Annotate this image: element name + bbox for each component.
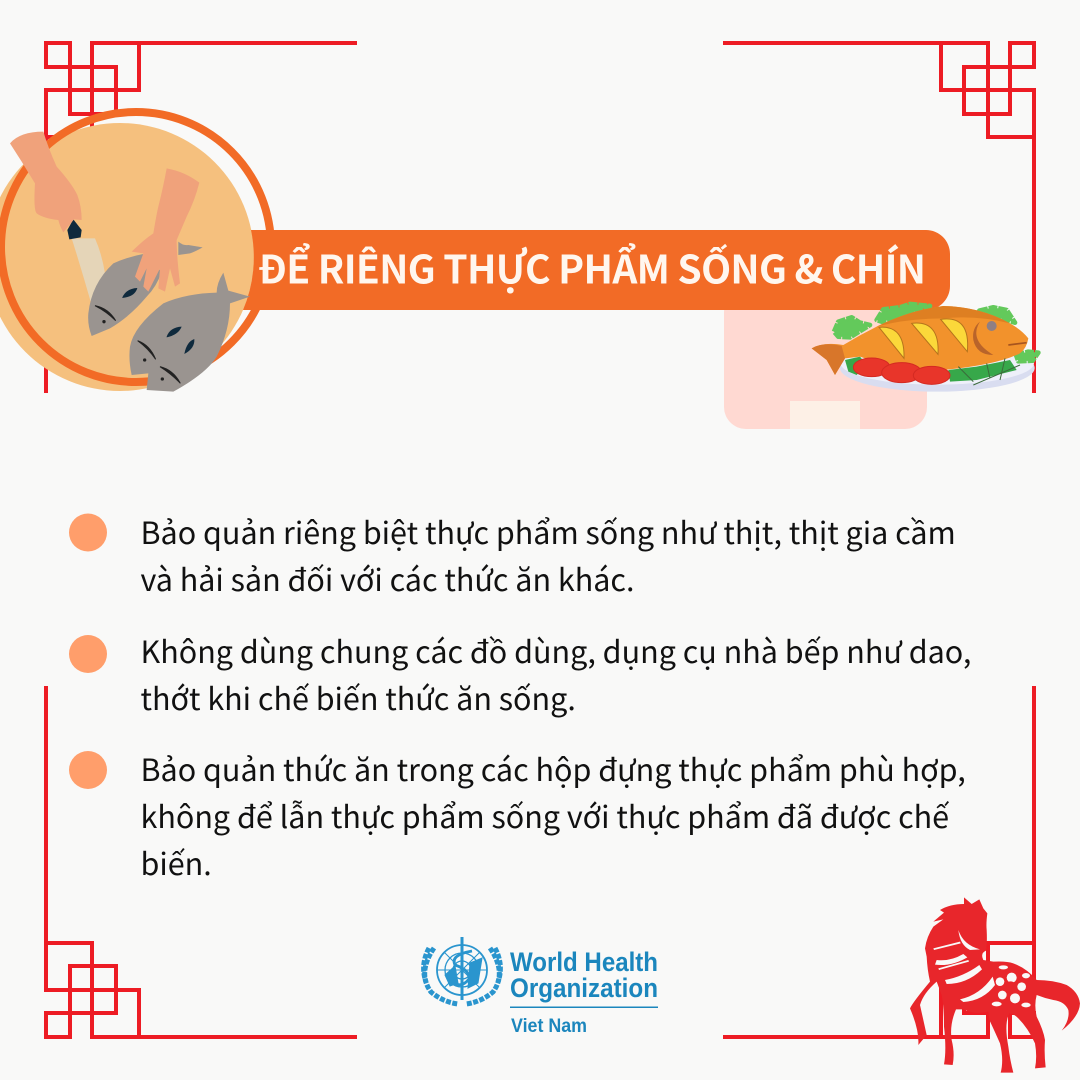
flower centre [1005, 981, 1017, 993]
bullet text 3: không để lẫn thực phẩm sống với thực phẩm đã được chế [140, 793, 949, 837]
bullet text 2: Không dùng chung các đồ dùng, dụng cụ nhà bếp như dao, [140, 628, 971, 672]
bullet text 1: và hải sản đối với các thức ăn khác. [140, 556, 634, 600]
plate [840, 342, 1035, 392]
frame: top-left corner [46, 43, 357, 393]
horse silhouette [910, 897, 1080, 1073]
tomato slices [853, 358, 950, 384]
tail shading [812, 344, 845, 375]
bullet text 1: Bảo quản riêng biệt thực phẩm sống như thịt, thịt gia cầm [140, 509, 956, 553]
lettuce [834, 304, 1038, 361]
dark greens [845, 357, 1017, 382]
bullet text 3: Bảo quản thức ăn trong các hộp đựng thực phẩm phù hợp, [140, 746, 966, 790]
Viet Nam: Viet Nam [511, 1016, 587, 1037]
gill and eye [973, 321, 1027, 355]
fish back shading [877, 306, 1010, 327]
WHO logo [424, 937, 658, 1037]
bullet 3 [69, 746, 966, 884]
bullet text 2: thớt khi chế biến thức ăn sống. [140, 675, 576, 719]
collar details [933, 930, 995, 1002]
frame: bottom-left corner [46, 686, 357, 1037]
peach circle [0, 123, 254, 391]
left hand [10, 132, 82, 232]
bullet text 3: biến. [140, 840, 212, 884]
cooked fish body [812, 306, 1028, 375]
herb sprig [958, 358, 1020, 385]
title banner [243, 230, 950, 310]
lower raw fish [129, 273, 250, 392]
pink card behind plate [724, 290, 927, 429]
WHO logo: Organization [510, 973, 658, 1003]
orange ring [1, 112, 271, 382]
WHO emblem [424, 937, 500, 1004]
WHO wordmark: World Health [510, 947, 658, 977]
raw fish tail [178, 242, 203, 255]
lemon slices [879, 319, 968, 358]
right hand [132, 168, 199, 292]
title: ĐỂ RIÊNG THỰC PHẨM SỐNG & CHÍN [258, 240, 926, 296]
illustration: cooked fish on plate [812, 304, 1038, 392]
bullet 1 [69, 509, 956, 600]
papercut red horse [910, 897, 1080, 1073]
upper raw fish [88, 254, 162, 336]
frame: top-right corner [723, 43, 1034, 393]
bullet 2 [69, 628, 971, 719]
frame: bottom-right corner [723, 686, 1034, 1037]
knife [67, 219, 105, 302]
flower cut-out [992, 965, 1031, 1007]
illustration: hands cutting raw fish [10, 132, 250, 392]
